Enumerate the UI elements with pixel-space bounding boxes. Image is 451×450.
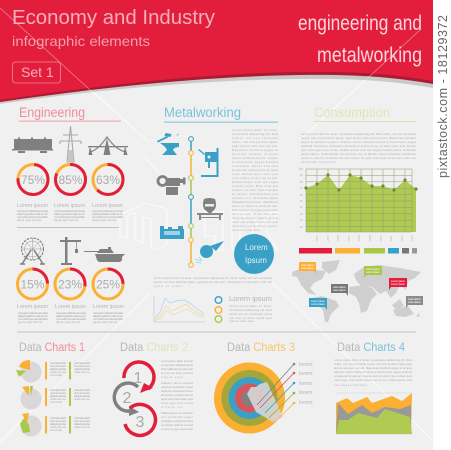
text column: cursus mi eget accumsan: [161, 427, 194, 431]
step 2: 2: [123, 390, 132, 407]
text column: fermentum massa justo sit: [161, 393, 193, 397]
text column: mollis, est non commodo: [232, 136, 278, 140]
bar notes: Lorem ipsum dolor: [50, 361, 66, 365]
area chart: 100: [299, 168, 304, 171]
text column: porttitor orci, at blandit neque: [232, 196, 278, 200]
captions row 2: commodo luctus nisi erat porttitor: [18, 317, 48, 321]
area chart: 60: [300, 194, 303, 197]
text column: lacus eu lobortis eleifend nec.: [232, 204, 278, 208]
paragraph: augue at porttitor tempus. Aliquam rutrum eleifend mauris a consectetur augue: [301, 140, 416, 144]
legend text: [229, 294, 273, 323]
donut 85%: 85%: [58, 173, 83, 187]
captions row 1: Lorem ipsum: [17, 203, 48, 209]
captions row 2: ligula eget lacinia: [18, 320, 42, 324]
heading: metalworking: [164, 105, 278, 122]
captions row 1: adipiscing elit duis mollis est non: [17, 212, 49, 216]
panel: metalworking: [154, 105, 279, 323]
map callout: red: Lorem ipsum: [391, 279, 406, 283]
captions row 2: commodo luctus nisi erat porttitor: [93, 317, 123, 321]
labels: lorem: [299, 371, 313, 377]
area chart: 2004: [315, 235, 319, 241]
map callout: dark grey: [331, 284, 348, 296]
icon: power pylon: [60, 126, 81, 162]
map callout: green: [364, 266, 382, 278]
heading: metalworking: Metalworking: [164, 105, 241, 120]
paragraph: accumsan fermentum.: [301, 160, 337, 164]
text column: phasellus vestibulum lacus: [161, 419, 194, 423]
captions row 1: ligula eget lacinia: [54, 218, 78, 222]
callout circle: Lorem: [245, 243, 268, 252]
heading: engineering: [19, 105, 121, 122]
icon: ferris wheel: [20, 238, 45, 264]
panel: engineering: [12, 105, 128, 324]
text column: Pellentesque nisl porttitor: [161, 411, 193, 415]
donut 75%: 75%: [21, 173, 45, 187]
step 3: 3: [136, 414, 145, 431]
area chart: 2011: [389, 235, 393, 241]
paragraph: consequat fermentum massa justo sit amet risus nullam quis: [334, 374, 413, 378]
icon: blower: [195, 241, 224, 263]
paragraph: lacus eu lobortis eleifend nec sed cursus mi eget accumsan fermentum cras nec: [301, 156, 417, 160]
captions row 1: commodo luctus nisi erat porttitor: [54, 215, 85, 219]
text column: eleifend consequat donec: [161, 389, 194, 393]
set badge: Set 1: [21, 64, 54, 80]
icon: drill press: [198, 148, 218, 177]
map callout: grey: [406, 296, 423, 308]
text column: vehicula aliquet nunc laoreet: [232, 220, 278, 224]
leader lines: [257, 363, 295, 422]
callout circle: [234, 234, 274, 274]
paragraph: luctus, nisi erat porttitor ligula, eget lacinia odio sem nec elit. Maecenas tincidunt: [301, 136, 416, 140]
text column: a consectetur augue eleifend: [232, 160, 278, 164]
text column: Nullam auctor erat nec augue: [232, 180, 278, 184]
legend text: consectetur adipiscing elit. Duis: [229, 308, 273, 312]
subtitle: infographic elements: [12, 33, 150, 49]
labels: lorem: [299, 381, 313, 387]
legend text: Lorem ipsum dolor sit amet,: [229, 304, 272, 308]
captions row 2: Lorem ipsum dolor sit amet consect: [18, 311, 48, 315]
text column: Lorem ipsum dolor sit amet: [161, 359, 193, 363]
captions row 1: [17, 203, 124, 222]
paragraph: luctus, nisi erat porttitor ligula, eget lacinia odio sem. Vestibulum id dignissim, nisl non: [154, 280, 272, 284]
step 1: 1: [134, 370, 143, 387]
map callout: green: Lorem ipsum: [366, 270, 381, 274]
labels: lorem: [299, 390, 313, 396]
text column: Maecenas tincidunt augue at: [232, 148, 278, 152]
text column: Aliquam rutrum eleifend: [161, 381, 194, 385]
bar notes: sit amet consect: [74, 419, 90, 423]
legend circles: [215, 297, 222, 322]
captions row 1: commodo luctus nisi erat porttitor: [92, 215, 123, 219]
text column: facilisis porta. Duis vitae nisi: [232, 184, 278, 188]
bar notes: [50, 361, 91, 432]
icon: lathe: [158, 176, 186, 195]
text column: tempus sit amet velit tristique: [232, 188, 278, 192]
donut 25%: [93, 269, 123, 299]
map callout: blue: Lorem ipsum: [311, 302, 326, 306]
text column: luctus, nisi erat porttitor ligula,: [232, 140, 278, 144]
donut 25%: 25%: [96, 278, 120, 292]
map callout: dark grey: Lorem ipsum: [333, 285, 347, 289]
stacked area chart: [336, 393, 412, 434]
bar notes: commodo: [50, 428, 62, 432]
captions row 1: Lorem ipsum dolor sit amet consect: [17, 209, 48, 213]
area chart: 2008: [357, 235, 361, 241]
paragraph: [334, 358, 413, 387]
icon: tank: [84, 247, 125, 262]
paragraph: neque sapien. Pellentesque nisl porttitor orci, at blandit neque phasellus vestibulum: [301, 152, 417, 156]
captions row 1: Lorem ipsum dolor sit amet consect: [92, 209, 123, 213]
map callout: grey: Lorem ipsum: [408, 300, 422, 304]
paragraph: nec augue facilisis.: [334, 383, 368, 387]
text column: Sed cursus mi eget accumsan: [232, 208, 278, 212]
captions row 1: adipiscing elit duis mollis est non: [54, 212, 86, 216]
captions row 2: adipiscing elit duis mollis est non: [18, 314, 48, 318]
text column: urna mollis ornare vel eu leo.: [232, 176, 278, 180]
map callout: orange: Lorem ipsum: [301, 266, 315, 270]
bar notes: adipiscing elit duis: [50, 422, 67, 426]
donut 85%: [56, 164, 86, 194]
bar notes: commodo: [50, 373, 62, 377]
captions row 1: Lorem ipsum: [54, 203, 86, 209]
text column: eget lacinia odio sem nec elit.: [232, 144, 278, 148]
line chart: [154, 296, 205, 322]
text column: dictum nulla amet.: [232, 228, 262, 232]
donut 23%: [54, 268, 86, 300]
labels: [299, 362, 313, 406]
text column: porttitor tempus. Aliquam: [232, 152, 279, 156]
heading: engineering: Engineering: [19, 105, 85, 120]
captions row 2: adipiscing elit duis mollis est non: [56, 314, 86, 318]
area chart: 40: [300, 206, 303, 209]
map callout: blue: [309, 298, 327, 310]
area chart: 30: [300, 213, 303, 216]
bar notes: mollis est non: [74, 425, 90, 429]
map callout: red: Lorem ipsum: [391, 282, 406, 286]
text column: consectetur adipiscing elit: [161, 363, 193, 367]
map callout: green: Lorem ipsum: [366, 267, 381, 271]
text column: consequat. Donec sed odio: [232, 164, 278, 168]
captions row 2: Lorem ipsum: [93, 304, 124, 310]
text column: consectetur adipiscing elit. Duis: [232, 132, 279, 136]
text column: rutrum eleifend mauris. Integer: [232, 156, 278, 160]
text column: tincidunt porta dolor sapien.: [232, 224, 278, 228]
text column: Phasellus fermentum. Vestibulum: [232, 200, 279, 204]
area chart: 50: [300, 200, 303, 203]
title: Economy and Industry: [12, 6, 216, 29]
text column: [232, 128, 279, 232]
paragraph: lacinia odio sem nec elit. Maecenas tincidunt augue at tempus: [334, 366, 413, 370]
bar notes: adipiscing elit duis: [74, 422, 91, 426]
area chart: 20: [300, 219, 303, 222]
world map: [292, 260, 421, 322]
captions row 2: Lorem ipsum: [55, 304, 86, 310]
pie 3: [20, 413, 42, 436]
text column: Duis mollis est non commodo: [161, 367, 194, 371]
paragraph: mollis, est non commodo luctus, nisi erat porttitor ligula eget: [334, 362, 412, 366]
captions row 1: Lorem ipsum dolor sit amet consect: [54, 209, 85, 213]
bar notes: sit amet consect: [74, 391, 90, 395]
legend bars: [299, 248, 417, 254]
captions row 1: ligula eget lacinia: [17, 218, 42, 222]
area chart: 70: [300, 187, 303, 190]
text column: ac sapien. Pellentesque nisl: [232, 192, 278, 196]
heading: consumption: Consumption: [314, 105, 390, 120]
area chart: 80: [300, 181, 303, 184]
bar notes: adipiscing elit duis: [74, 367, 91, 371]
map callout: blue: Lorem ipsum: [311, 299, 326, 303]
icon: machine box: [160, 226, 184, 239]
panel: data charts 2: [114, 342, 194, 435]
captions row 1: commodo luctus nisi erat porttitor: [17, 215, 48, 219]
area chart: 2013: [410, 235, 414, 241]
text column: fermentum massa justo sit amet: [232, 168, 278, 172]
paragraph: risus eget urna mollis ornare vel eu leo nullam auctor erat: [334, 378, 412, 382]
panel: consumption: [292, 105, 423, 322]
paragraph: eleifend consequat. Phasellus fermentum massa justo, sit amet risus cras nullam: [301, 144, 417, 148]
donut 63%: [93, 164, 123, 194]
area chart: 2009: [368, 235, 372, 241]
captions row 2: adipiscing elit duis mollis est non: [93, 314, 124, 318]
text column: luctus nisi erat porttitor: [161, 371, 193, 375]
paragraph: [154, 276, 272, 288]
text column: mauris a consectetur augue: [161, 385, 194, 389]
panel: data charts 4: [334, 342, 413, 434]
bars: [45, 362, 71, 434]
bar notes: commodo: [50, 400, 62, 404]
donut 15%: 15%: [20, 278, 45, 292]
area chart: 90: [300, 174, 303, 177]
header banner: [0, 0, 433, 108]
topic title: [298, 12, 422, 67]
map callout: grey: Lorem ipsum: [408, 297, 422, 301]
target chart: [214, 362, 285, 434]
captions row 2: commodo luctus nisi erat porttitor: [56, 317, 86, 321]
bar notes: mollis est non: [50, 397, 66, 401]
heading: Data Charts 1: [19, 342, 85, 354]
paragraph: Lorem ipsum dolor sit amet, consectetur adipiscing elit. Duis mollis, est non commodo: [154, 276, 272, 280]
text column: ligula eget: [161, 375, 183, 379]
captions row 2: Lorem ipsum dolor sit amet consect: [93, 311, 123, 315]
paragraph: Lorem ipsum dolor sit amet, consectetur adipiscing elit. Duis mollis, est non commodo: [301, 132, 416, 136]
heading: Data Charts 2: [120, 342, 188, 354]
bar notes: Lorem ipsum dolor: [74, 388, 90, 392]
heading: Data Charts 3: [227, 342, 295, 354]
text column: [161, 359, 194, 431]
captions row 1: ligula eget lacinia: [92, 218, 116, 222]
bar notes: mollis est non: [74, 370, 90, 374]
area chart: 2007: [347, 235, 351, 241]
icon: bridge: [88, 137, 128, 155]
paragraph: Aliquam rutrum eleifend mauris a consectetur augue eleifend: [334, 370, 412, 374]
labels: lorem: [299, 362, 313, 368]
topic title: metalworking: [317, 44, 422, 67]
captions row 2: [17, 304, 124, 324]
icon: tower crane: [60, 237, 81, 265]
heading: consumption: [314, 105, 416, 122]
captions row 2: ligula eget lacinia: [93, 320, 118, 324]
icon: rail wagon: [12, 138, 53, 153]
bar notes: sit amet consect: [74, 364, 90, 368]
donut 63%: 63%: [96, 173, 120, 187]
map callout: dark grey: Lorem ipsum: [333, 288, 347, 292]
area chart: [299, 168, 418, 241]
legend text: Lorem ipsum: [229, 294, 272, 303]
bar notes: mollis est non: [50, 425, 66, 429]
panel: data charts 1: [16, 342, 91, 436]
bar notes: adipiscing elit duis: [50, 367, 67, 371]
text column: Lorem ipsum dolor sit amet,: [232, 128, 278, 132]
labels: lorem: [299, 400, 313, 406]
text column: fringilla semper mauris at orci: [232, 216, 278, 220]
area chart: 10: [300, 226, 303, 229]
area chart: 2010: [379, 235, 383, 241]
timeline: [189, 137, 193, 267]
paragraph: gula et amet.: [154, 284, 184, 288]
donut 15%: [17, 268, 48, 300]
set badge: [12, 62, 60, 83]
icon: welder: [197, 198, 223, 220]
paragraph: Lorem ipsum dolor sit amet, consectetur adipiscing elit. Duis: [334, 358, 413, 362]
text column: risus eget urna mollis: [161, 401, 194, 405]
legend text: nisi erat porttitor ligula eget: [229, 316, 272, 320]
bar notes: Lorem ipsum dolor: [50, 416, 66, 420]
legend text: mollis, est non commodo luctus: [229, 312, 273, 316]
bar notes: sit amet consect: [50, 364, 66, 368]
bar notes: mollis est non: [50, 370, 66, 374]
map callout: orange: [299, 262, 316, 274]
area chart: 2005: [326, 235, 330, 241]
text column: fermentum. Cras nec nisi: [232, 212, 278, 216]
heading: Data Charts 4: [337, 342, 406, 354]
text column: orci at blandit neque: [161, 415, 194, 419]
icon: anvil: [157, 133, 179, 155]
bar notes: Lorem ipsum dolor: [50, 388, 66, 392]
captions row 1: adipiscing elit duis mollis est non: [92, 212, 124, 216]
captions row 1: Lorem ipsum: [92, 203, 124, 209]
paragraph: quis risus eget urna mollis. Nullam auctor erat nec augue facilisis porta, at blandit: [301, 148, 416, 152]
map callout: orange: Lorem ipsum: [301, 263, 315, 267]
panel: data charts 3: [214, 342, 313, 434]
bar notes: sit amet consect: [50, 391, 66, 395]
topic title: engineering and: [298, 12, 422, 35]
watermark id: pixtastock.com - 18129372: [436, 15, 450, 178]
map callout: red: [389, 278, 407, 290]
bar notes: Lorem ipsum dolor: [74, 416, 90, 420]
bar notes: mollis est non: [74, 397, 90, 401]
area chart: 2006: [336, 235, 340, 241]
donut 75%: [17, 163, 49, 196]
captions row 2: ligula eget lacinia: [56, 320, 80, 324]
bar notes: sit amet consect: [50, 419, 66, 423]
text column: amet risus cras nullam quis: [161, 397, 194, 401]
callout circle: Ipsum: [245, 256, 267, 265]
bar notes: Lorem ipsum dolor: [74, 361, 90, 365]
bar notes: adipiscing elit duis: [74, 394, 91, 398]
paragraph: [301, 132, 417, 164]
bar notes: adipiscing elit duis: [50, 394, 67, 398]
text column: risus. Nullam quis risus eget: [232, 172, 278, 176]
text column: eu lobortis eleifend nec sed: [161, 423, 194, 427]
pie 1: [16, 360, 42, 382]
area chart: 2012: [400, 235, 404, 241]
text column: ornare vel: [161, 405, 183, 409]
captions row 2: Lorem ipsum: [17, 304, 48, 310]
donut 23%: 23%: [58, 278, 82, 292]
captions row 2: Lorem ipsum dolor sit amet consect: [56, 311, 86, 315]
legend text: lacinia odio sem.: [229, 319, 255, 323]
pie 2: [20, 386, 42, 410]
